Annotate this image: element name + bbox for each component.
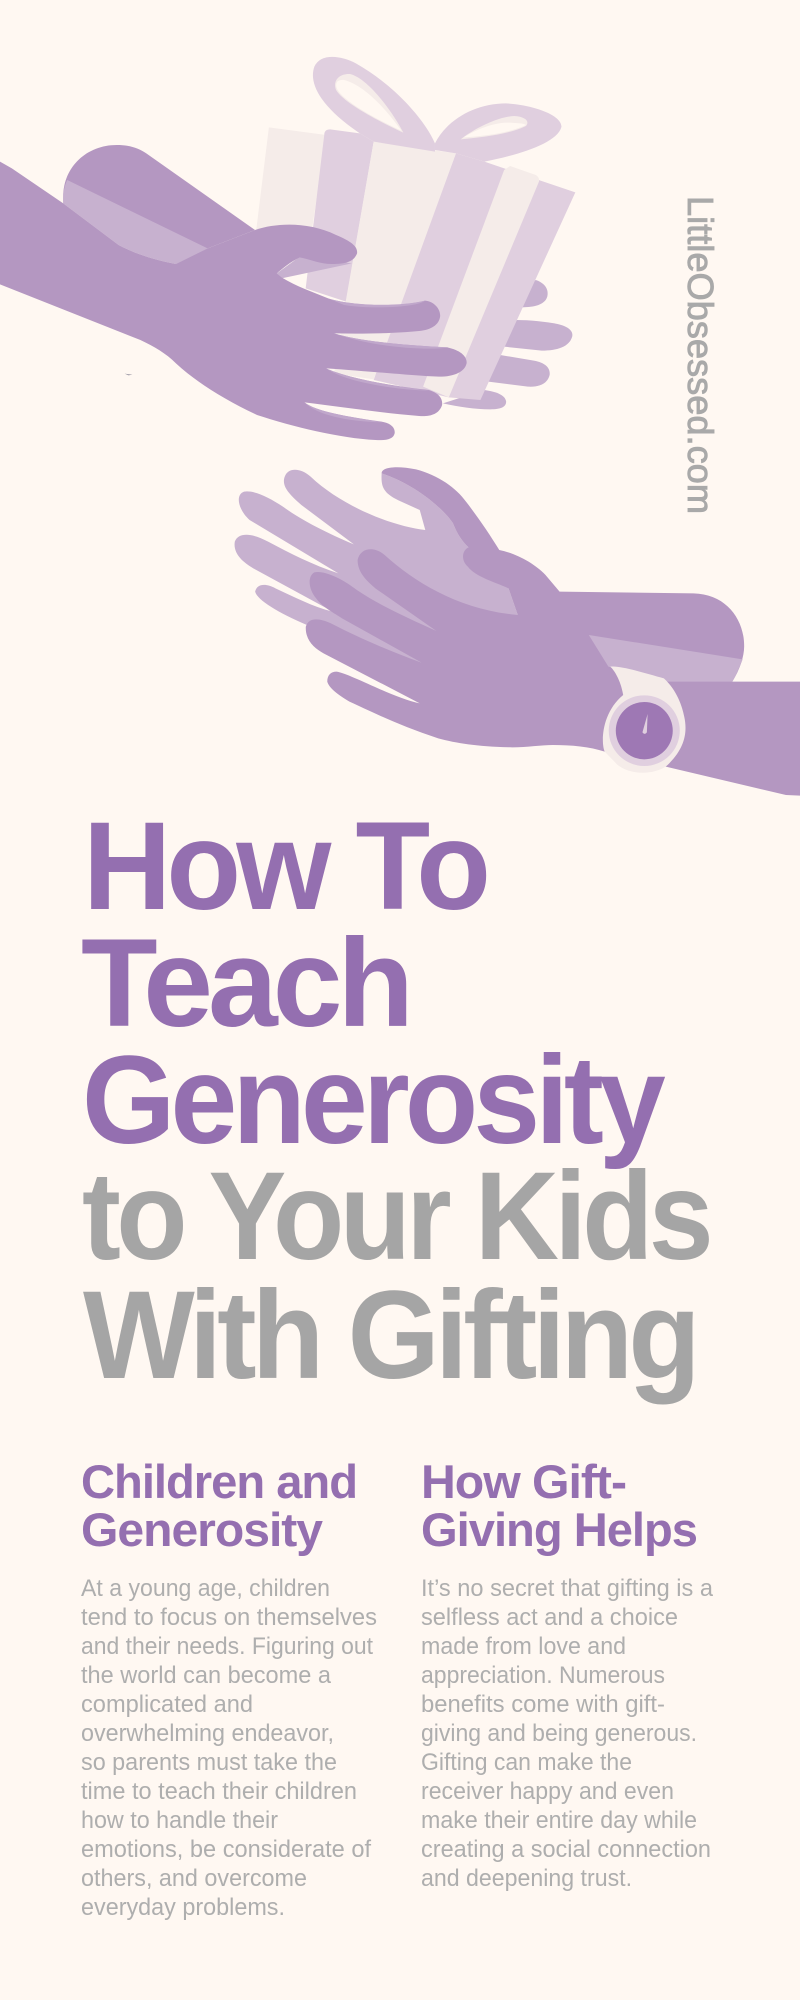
- heading: children and generosity: [81, 1455, 357, 1556]
- icon: wristwatch: [603, 666, 686, 773]
- title: Teach: [81, 914, 409, 1053]
- text block: children and generosity body: overwhelming endeavor,: [81, 1720, 334, 1747]
- text block: how gift-giving helps body: It’s no secret that gifting is a: [421, 1575, 714, 1602]
- icon: gift box: [256, 57, 575, 400]
- text block: children and generosity body: emotions, be considerate of: [81, 1836, 371, 1863]
- text block: children and generosity body: everyday problems.: [81, 1894, 285, 1921]
- text block: how gift-giving helps body: Gifting can make the: [421, 1749, 632, 1776]
- text block: how gift-giving helps body: creating a social connection: [421, 1836, 711, 1863]
- heading: how gift-giving helps: Giving Helps: [421, 1503, 697, 1556]
- text block: how gift-giving helps body: receiver happy and even: [421, 1778, 674, 1805]
- panel: children and generosity: [81, 1455, 377, 1921]
- vertical brand text: LittleObsessed.com: [680, 196, 721, 514]
- title: [81, 797, 709, 1405]
- text block: how gift-giving helps body: selfless act and a choice: [421, 1604, 678, 1631]
- text block: children and generosity body: others, and overcome: [81, 1865, 307, 1892]
- icon: far receiving hand: [235, 470, 518, 663]
- text block: children and generosity body: the world can become a: [81, 1662, 332, 1689]
- text block: how gift-giving helps body: [421, 1575, 714, 1892]
- icon: gift bow right loop: [435, 103, 561, 162]
- text block: children and generosity body: time to teach their children: [81, 1778, 357, 1805]
- text block: how gift-giving helps body: made from love and: [421, 1633, 626, 1660]
- icon: giving hand: [0, 162, 467, 440]
- text block: children and generosity body: so parents must take the: [81, 1749, 337, 1776]
- text block: how gift-giving helps body: giving and being generous.: [421, 1720, 697, 1747]
- icon: sleeve shading: [589, 635, 743, 682]
- heading: how gift-giving helps: How Gift-: [421, 1455, 626, 1508]
- text block: children and generosity body: tend to focus on themselves: [81, 1604, 377, 1631]
- icon: gift bow left loop: [313, 57, 435, 152]
- text block: children and generosity body: and their needs. Figuring out: [81, 1633, 373, 1660]
- text block: how gift-giving helps body: make their entire day while: [421, 1807, 697, 1834]
- text block: children and generosity body: At a young age, children: [81, 1575, 330, 1602]
- title: How To: [83, 797, 487, 936]
- text block: how gift-giving helps body: appreciation. Numerous: [421, 1662, 665, 1689]
- text block: children and generosity body: how to handle their: [81, 1807, 278, 1834]
- illustration: upper hand offering gift: [0, 57, 575, 440]
- heading: children and generosity: Generosity: [81, 1503, 323, 1556]
- text block: children and generosity body: [81, 1575, 377, 1921]
- text block: children and generosity body: complicated and: [81, 1691, 253, 1718]
- title: With Gifting: [83, 1266, 696, 1405]
- panel: how gift-giving helps: [421, 1455, 714, 1892]
- icon: near receiving hand and arm: [306, 467, 800, 796]
- heading: how gift-giving helps: [421, 1455, 697, 1556]
- text block: how gift-giving helps body: and deepening trust.: [421, 1865, 632, 1892]
- icon: rear fingers behind the gift: [443, 280, 572, 409]
- illustration: lower receiving hand with watch: [235, 467, 800, 796]
- title: to Your Kids: [82, 1147, 709, 1286]
- heading: children and generosity: Children and: [81, 1455, 357, 1508]
- icon: far arm: [63, 145, 255, 264]
- text block: how gift-giving helps body: benefits come with gift-: [421, 1691, 665, 1718]
- title: Generosity: [82, 1031, 665, 1170]
